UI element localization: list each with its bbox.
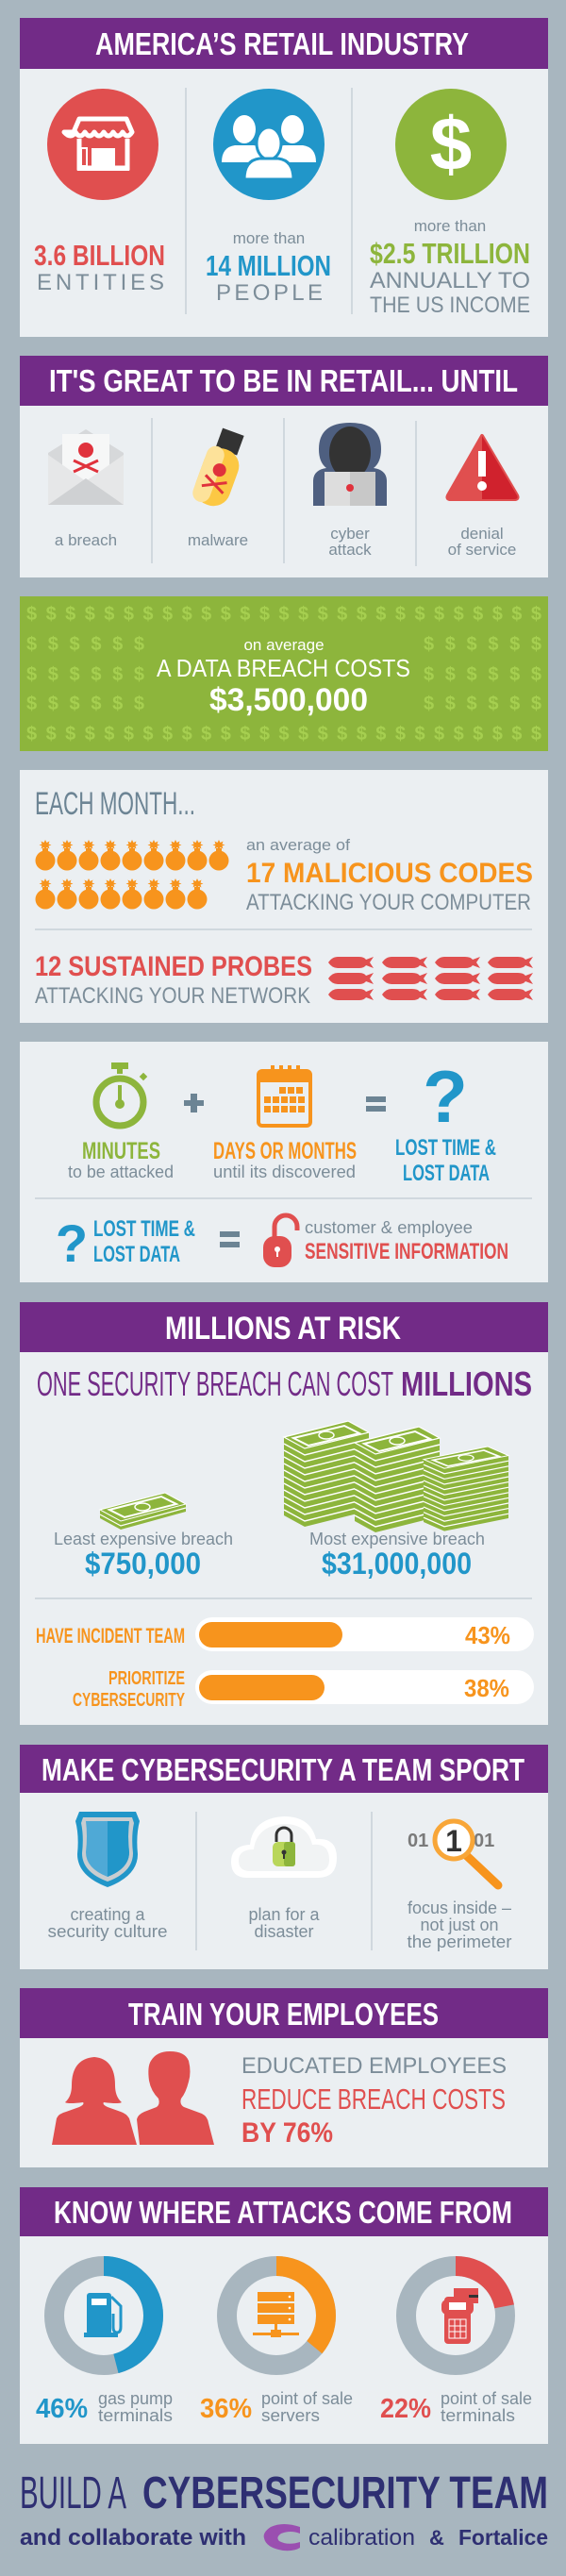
- text: most expensive: [309, 1530, 485, 1581]
- heading: make cybersecurity a team sport: [20, 1745, 548, 1793]
- icon: binary magnifier: 01: [474, 1831, 494, 1851]
- text: minutes: to be attacked: [68, 1163, 174, 1181]
- icon: binary magnifier: [408, 1821, 498, 1885]
- text: most expensive: $31,000,000: [322, 1547, 472, 1581]
- text: 36% pos servers: 36%: [200, 2394, 252, 2424]
- heading: train your employees: [20, 1988, 548, 2038]
- text: creating a security culture: security culture: [47, 1922, 168, 1941]
- text: focus inside: focus inside –: [408, 1899, 511, 1917]
- text: 14 million people: 14 MILLION: [206, 249, 331, 282]
- footer: build a cybersecurity team: BUILD A: [20, 2468, 126, 2518]
- text: days or months: until its discovered: [213, 1163, 356, 1181]
- text: 12 sustained probes: ATTACKING YOUR NETWORK: [35, 983, 310, 1009]
- bar chart: incident team: [36, 1617, 534, 1651]
- icon: equals 2: [220, 1231, 240, 1247]
- text: focus inside: [408, 1899, 511, 1951]
- bar chart: incident team: HAVE INCIDENT TEAM: [36, 1624, 185, 1648]
- icon: binary magnifier: 01: [408, 1831, 428, 1851]
- text: focus inside: the perimeter: [408, 1932, 511, 1951]
- icon: binary magnifier: 1: [445, 1824, 462, 1858]
- text: lost time lost data: [395, 1135, 496, 1186]
- bar chart: prioritize cybersecurity: [73, 1668, 534, 1711]
- text: creating a security culture: [47, 1905, 168, 1941]
- text: a data breach costs: [157, 636, 410, 718]
- icon: dollar: $: [430, 102, 472, 186]
- heading: millions at risk: MILLIONS AT RISK: [165, 1311, 401, 1347]
- heading: america's retail industry: [20, 18, 548, 69]
- text: 14 million people: [206, 229, 331, 306]
- text: 17 malicious codes: an average of: [246, 836, 350, 854]
- text: 2.5 trillion: [370, 217, 530, 318]
- panel: equation: [20, 1042, 548, 1282]
- footer: collaborate with logos: and collaborate with: [20, 2525, 246, 2551]
- panel: team sport: [20, 1745, 548, 1969]
- footer: collaborate with logos: [20, 2524, 548, 2551]
- chart: pos servers donut: [226, 2267, 326, 2365]
- text: 22% pos terminals: terminals: [441, 2406, 515, 2425]
- text: 2.5 trillion: $2.5 TRILLION: [370, 237, 530, 270]
- icon: probes: [328, 957, 533, 1000]
- text: least expensive: [54, 1530, 233, 1581]
- text: 3.6 billion entities: ENTITIES: [37, 270, 164, 295]
- icon: plus: [184, 1094, 204, 1112]
- icon: warning: [447, 436, 518, 499]
- panel: millions at risk: [20, 1302, 548, 1725]
- icon: dollar: [395, 89, 507, 200]
- chart: gas pump donut: [55, 2267, 153, 2365]
- panel: data breach cost: $$$$$$: [26, 664, 144, 685]
- text: sensitive information: [305, 1218, 508, 1264]
- icon: cloud lock: [231, 1816, 337, 1878]
- text: creating a security culture: creating a: [70, 1905, 146, 1924]
- text: most expensive: Most expensive breach: [309, 1530, 485, 1548]
- heading: know where attacks come from: [20, 2187, 548, 2236]
- panel: data breach cost: $$$$$$: [26, 634, 144, 655]
- panel: america's retail industry: [20, 18, 548, 337]
- bar chart: prioritize cybersecurity: 38%: [464, 1674, 509, 1702]
- heading: it's great to be in retail until: [20, 356, 548, 406]
- bar chart: incident team: 43%: [465, 1621, 510, 1649]
- text: lost time lost data row: [56, 1213, 195, 1273]
- text: a breach: a breach: [55, 531, 117, 549]
- text: cyber attack: attack: [328, 541, 372, 559]
- text: 46% gas pump terminals: terminals: [98, 2406, 173, 2425]
- heading: america's retail industry: AMERICA’S RETAIL INDUSTRY: [95, 26, 469, 61]
- text: 22% pos terminals: 22%: [380, 2394, 431, 2424]
- text: 36% pos servers: [200, 2389, 353, 2425]
- icon: shield: [75, 1812, 140, 1887]
- text: 3.6 billion entities: [34, 239, 165, 295]
- text: least expensive: $750,000: [85, 1547, 201, 1581]
- text: 14 million people: more than: [233, 229, 305, 247]
- text: 22% pos terminals: point of sale: [441, 2389, 532, 2408]
- icon: small money: [100, 1493, 186, 1530]
- icon: employees: [52, 2051, 214, 2145]
- panel: data breach cost: $$$$$$: [424, 664, 541, 685]
- text: 17 malicious codes: 17 MALICIOUS CODES: [246, 858, 533, 889]
- text: cyber attack: cyber: [330, 525, 370, 543]
- text: cyber attack: [328, 525, 372, 559]
- text: 46% gas pump terminals: [36, 2389, 173, 2425]
- text: denial of service: denial: [460, 525, 504, 543]
- text: a data breach costs: on average: [243, 636, 325, 654]
- panel: data breach cost: [20, 596, 548, 751]
- text: educated employees: [241, 2053, 507, 2149]
- icon: breach envelope: [48, 429, 124, 505]
- panel: great to be in retail until: [20, 356, 548, 577]
- icon: question mark: ?: [423, 1055, 468, 1138]
- icon: stopwatch: [96, 1062, 147, 1126]
- text: lost time lost data row: LOST DATA: [93, 1242, 180, 1267]
- text: denial of service: [448, 525, 516, 559]
- panel: data breach cost: $$$$$$: [26, 694, 144, 714]
- panel: data breach cost: $$$$$$$$$$$$$$$$$$$$$$$$$$$: [26, 604, 541, 625]
- icon: bombs: [36, 840, 228, 910]
- text: least expensive: Least expensive breach: [54, 1530, 233, 1548]
- text: denial of service: of service: [448, 541, 516, 559]
- text: 3.6 billion entities: 3.6 BILLION: [34, 239, 165, 272]
- icon: equals: [366, 1096, 386, 1112]
- icon: open lock: [263, 1215, 297, 1267]
- text: one security breach can cost millions: MILLIONS: [401, 1364, 532, 1403]
- text: 12 sustained probes: [35, 951, 312, 1009]
- footer: collaborate with logos: &: [429, 2526, 444, 2550]
- heading: each month: EACH MONTH...: [35, 786, 195, 822]
- icon: malware usb: [190, 426, 250, 510]
- text: 46% gas pump terminals: 46%: [36, 2394, 88, 2424]
- text: a data breach costs: A DATA BREACH COSTS: [157, 654, 410, 682]
- footer: collaborate with logos: calibration: [308, 2525, 415, 2551]
- icon: money stacks: [284, 1421, 508, 1532]
- text: 46% gas pump terminals: gas pump: [98, 2389, 173, 2408]
- panel: data breach cost: $$$$$$: [424, 634, 541, 655]
- text: 2.5 trillion: ANNUALLY TO: [370, 268, 530, 293]
- panel: data breach cost: $$$$$$$$$$$$$$$$$$$$$$$$$$$: [26, 724, 541, 744]
- footer: collaborate with logos: Fortalice: [458, 2525, 548, 2550]
- text: days or months: DAYS OR MONTHS: [213, 1138, 357, 1164]
- text: educated employees: BY 76%: [241, 2117, 333, 2149]
- text: minutes: [68, 1138, 174, 1181]
- text: 2.5 trillion: THE US INCOME: [370, 293, 530, 318]
- text: 14 million people: PEOPLE: [216, 280, 323, 306]
- panel: each month: [20, 770, 548, 1023]
- panel: know where attacks come from: [20, 2187, 548, 2444]
- text: 17 malicious codes: [246, 836, 533, 915]
- text: minutes: MINUTES: [82, 1138, 160, 1164]
- text: a data breach costs: $3,500,000: [209, 682, 368, 718]
- text: lost time lost data: LOST TIME &: [395, 1135, 496, 1161]
- text: 2.5 trillion: more than: [414, 217, 486, 235]
- icon: store: [47, 89, 158, 200]
- heading: millions at risk: [20, 1302, 548, 1352]
- text: 12 sustained probes: 12 SUSTAINED PROBES: [35, 951, 312, 982]
- text: sensitive information: customer & employee: [305, 1218, 473, 1237]
- text: malware: malware: [188, 531, 248, 549]
- text: lost time lost data: LOST DATA: [403, 1161, 490, 1186]
- text: 36% pos servers: servers: [261, 2406, 320, 2425]
- text: days or months: [213, 1138, 357, 1181]
- bar chart: prioritize cybersecurity: CYBERSECURITY: [73, 1690, 185, 1711]
- bar chart: prioritize cybersecurity: PRIORITIZE: [108, 1668, 185, 1689]
- text: plan for a disaster: plan for a: [248, 1905, 321, 1924]
- text: lost time lost data row: ?: [56, 1213, 88, 1273]
- text: plan for a disaster: [248, 1905, 321, 1941]
- panel: train your employees: [20, 1988, 548, 2167]
- heading: train your employees: TRAIN YOUR EMPLOYEES: [128, 1997, 439, 2032]
- text: educated employees: EDUCATED EMPLOYEES: [241, 2053, 507, 2079]
- panel: data breach cost: $$$$$$: [424, 694, 541, 714]
- icon: people: [213, 89, 325, 200]
- text: 22% pos terminals: [380, 2389, 532, 2425]
- chart: pos terminals donut: [406, 2267, 506, 2365]
- icon: calendar: [258, 1065, 310, 1126]
- icon: hacker: [313, 423, 387, 506]
- text: focus inside: not just on: [420, 1915, 499, 1934]
- text: 36% pos servers: point of sale: [261, 2389, 353, 2408]
- text: plan for a disaster: disaster: [254, 1922, 314, 1941]
- text: lost time lost data row: LOST TIME &: [93, 1216, 195, 1242]
